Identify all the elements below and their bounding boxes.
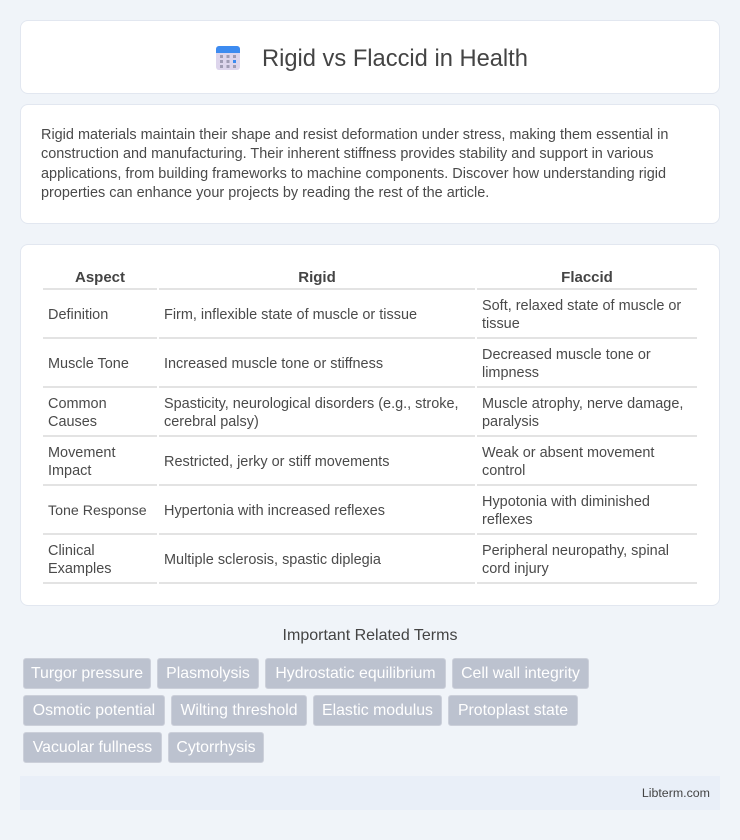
tag: [23, 658, 151, 689]
row: Definition: [48, 298, 681, 332]
icon: calendar: [216, 46, 240, 70]
row: Muscle Tone: limpness: [482, 365, 539, 381]
row: Common Causes: cerebral palsy): [164, 414, 259, 430]
intro text panel: [20, 104, 720, 224]
intro paragraph: Rigid materials maintain their shape and resist deformation under stress, making them essential in: [41, 127, 668, 143]
row: Common Causes: paralysis: [482, 414, 539, 430]
tag: [313, 695, 442, 726]
row: Common Causes: Spasticity, neurological disorders (e.g., stroke,: [164, 396, 459, 412]
tag: Cytorrhysis: [176, 739, 256, 756]
row: Movement Impact: Movement: [48, 445, 115, 461]
tag: Plasmolysis: [166, 665, 250, 682]
row: Clinical Examples: Peripheral neuropathy, spinal: [482, 543, 669, 559]
row: Tone Response: reflexes: [482, 512, 533, 528]
row: Movement Impact: Weak or absent movement: [482, 445, 654, 461]
tag: Wilting threshold: [180, 702, 298, 719]
row: Definition: Soft, relaxed state of muscle or: [482, 298, 681, 314]
row: Clinical Examples: Examples: [48, 561, 111, 577]
tag: [171, 695, 307, 726]
tag: [265, 658, 446, 689]
row: Clinical Examples: [48, 543, 669, 577]
tag: Vacuolar fullness: [33, 739, 152, 756]
related terms tags: [23, 658, 589, 763]
comparison table panel: [20, 244, 720, 606]
intro paragraph: applications, from building frameworks to machine components. Discover how understanding rigid: [41, 166, 666, 182]
row: Clinical Examples: cord injury: [482, 561, 549, 577]
row: Common Causes: [48, 396, 683, 430]
row: Muscle Tone: Decreased muscle tone or: [482, 347, 651, 363]
row: Movement Impact: control: [482, 463, 525, 479]
tag: Cell wall integrity: [461, 665, 580, 682]
tag: [168, 732, 264, 763]
tag: [23, 732, 162, 763]
footer bar: [20, 776, 720, 810]
header panel: [20, 20, 720, 94]
tag: Elastic modulus: [322, 702, 433, 719]
tag: Hydrostatic equilibrium: [275, 665, 436, 682]
row: Tone Response: [48, 494, 650, 528]
row: Tone Response: Tone Response: [48, 503, 147, 519]
table header row: Rigid: [298, 269, 336, 286]
intro paragraph: construction and manufacturing. Their inherent stiffness provides stability and support in various: [41, 146, 653, 162]
row: Definition: Definition: [48, 307, 108, 323]
row: Tone Response: Hypotonia with diminished: [482, 494, 650, 510]
row: Tone Response: Hypertonia with increased reflexes: [164, 503, 385, 519]
row: Movement Impact: Restricted, jerky or stiff movements: [164, 454, 389, 470]
table header row: [75, 269, 613, 286]
row: Clinical Examples: Multiple sclerosis, spastic diplegia: [164, 552, 381, 568]
row: Common Causes: Common: [48, 396, 107, 412]
row: Common Causes: Muscle atrophy, nerve damage,: [482, 396, 683, 412]
related terms heading: Important Related Terms: [283, 627, 457, 644]
tag: [448, 695, 578, 726]
row: Movement Impact: [48, 445, 654, 479]
tag: [452, 658, 589, 689]
row: Muscle Tone: Muscle Tone: [48, 356, 129, 372]
table header row: Aspect: [75, 269, 125, 286]
tag: Osmotic potential: [33, 702, 155, 719]
row: Definition: tissue: [482, 316, 520, 332]
tag: [23, 695, 165, 726]
row: Clinical Examples: Clinical: [48, 543, 95, 559]
tag: Turgor pressure: [31, 665, 143, 682]
row: Movement Impact: Impact: [48, 463, 91, 479]
footer credit: Libterm.com: [642, 786, 710, 800]
table header row: Flaccid: [561, 269, 613, 286]
tag: Protoplast state: [458, 702, 568, 719]
tag: [157, 658, 259, 689]
comparison table: [43, 269, 697, 584]
title: Rigid vs Flaccid in Health: [262, 46, 528, 72]
row: Definition: Firm, inflexible state of muscle or tissue: [164, 307, 417, 323]
intro paragraph: properties can enhance your projects by reading the rest of the article.: [41, 185, 489, 201]
row: Muscle Tone: [48, 347, 651, 381]
row: Muscle Tone: Increased muscle tone or stiffness: [164, 356, 383, 372]
row: Common Causes: Causes: [48, 414, 97, 430]
intro paragraph: [41, 127, 668, 201]
